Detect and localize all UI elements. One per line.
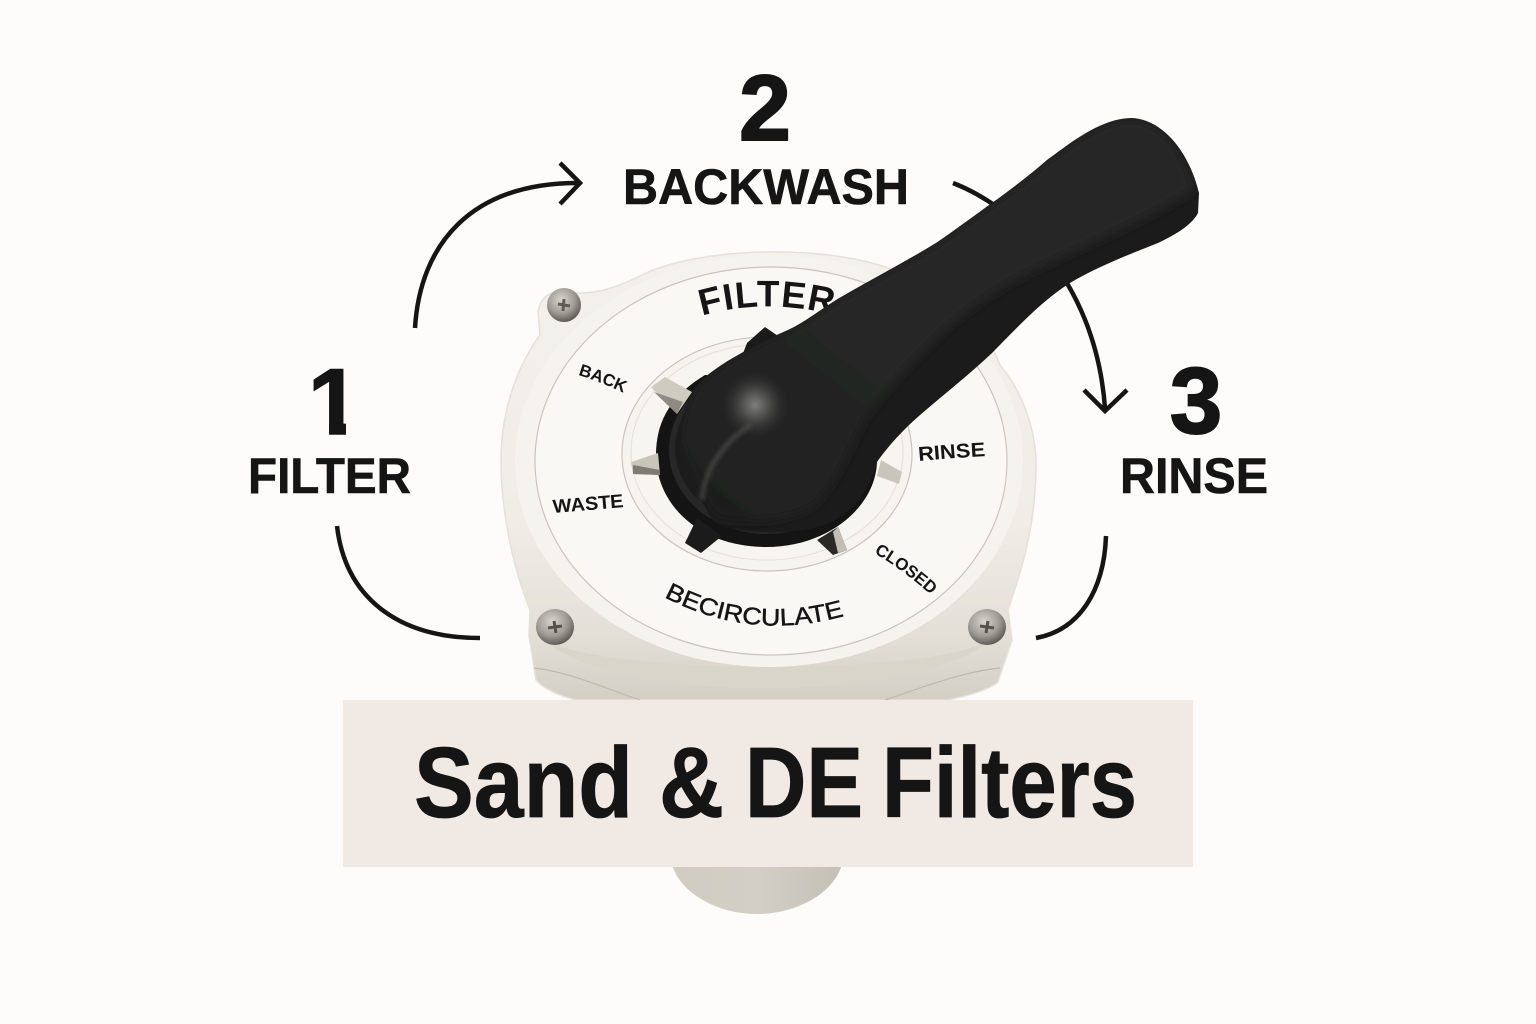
dial face xyxy=(535,267,1007,655)
bottom shadow crescent xyxy=(545,640,990,688)
title: Filters xyxy=(882,727,1137,839)
title panel xyxy=(343,700,1193,867)
dial labels: FILTER xyxy=(698,280,834,315)
step 3 label: 3 xyxy=(1170,348,1222,453)
screw bottom left xyxy=(536,609,574,645)
valve body xyxy=(501,252,1036,700)
multiport valve xyxy=(500,118,1199,914)
step 1 label xyxy=(248,349,411,504)
step 1 label: 1 xyxy=(308,349,360,454)
dial labels xyxy=(552,280,985,626)
dial labels: CLOSED xyxy=(876,545,936,592)
step 1 label: FILTER xyxy=(248,448,411,504)
step 3 label: RINSE xyxy=(1120,448,1268,504)
screw top left xyxy=(547,288,581,322)
outer rim xyxy=(515,255,1023,667)
flange seam xyxy=(534,668,1000,700)
dial labels: BECIRCULATE xyxy=(666,582,844,626)
lower pipe xyxy=(671,860,843,914)
title xyxy=(414,727,1137,839)
black collar xyxy=(656,375,877,547)
step 3 label xyxy=(1120,348,1268,504)
step 2 label: 2 xyxy=(739,56,791,160)
dial labels: RINSE xyxy=(919,442,985,461)
screw bottom right xyxy=(968,609,1006,645)
inner ring xyxy=(622,337,912,571)
title: DE xyxy=(745,727,863,839)
star spokes xyxy=(631,327,902,555)
knob ridge xyxy=(702,425,751,500)
dial labels: BACK xyxy=(579,364,628,393)
handle top surface xyxy=(708,118,1197,414)
step 2 label xyxy=(623,56,909,215)
arrow: lower left xyxy=(337,526,480,638)
valve neck xyxy=(576,660,948,705)
title: & xyxy=(659,727,724,839)
arrow: backwash to rinse xyxy=(953,183,1127,411)
dial labels: WASTE xyxy=(552,494,624,513)
step 2 label: BACKWASH xyxy=(623,159,909,215)
arrow: filter to backwash xyxy=(415,163,580,328)
knob highlight xyxy=(721,371,789,439)
title: Sand xyxy=(414,727,633,839)
handle xyxy=(681,118,1199,532)
arrow: rinse to filter lower right xyxy=(1036,536,1106,638)
